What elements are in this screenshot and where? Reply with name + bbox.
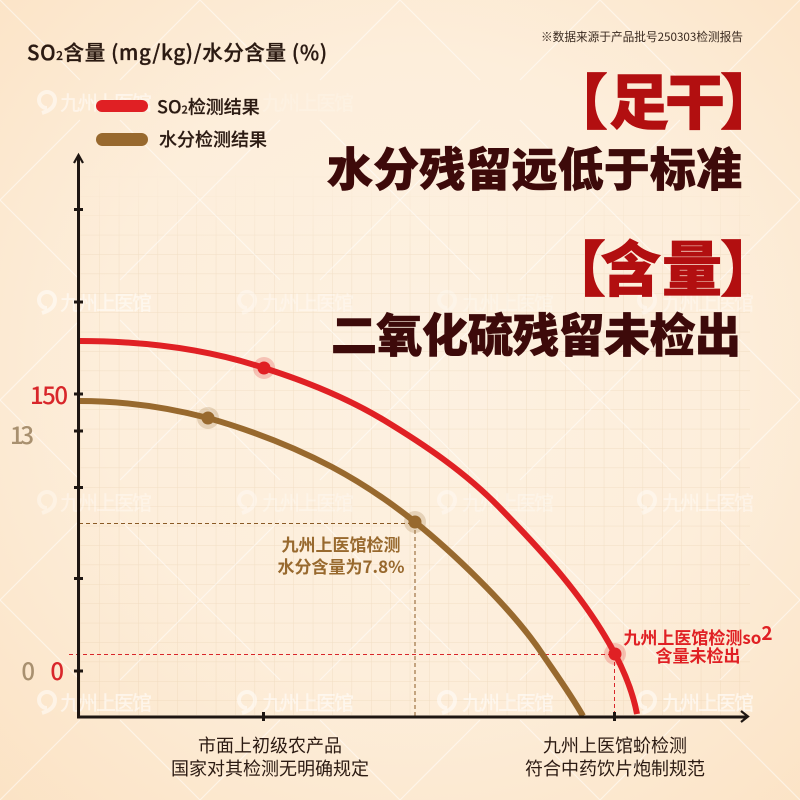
grid background (80, 170, 750, 715)
watermark text: 九州上医馆 (462, 287, 554, 316)
x label 2: 九州上医馆蚧检测 (543, 732, 687, 758)
axes (74, 155, 748, 722)
callout: SO2: 2 (761, 619, 773, 646)
x label 1: 国家对其检测无明确规定 (171, 755, 369, 781)
legend: SO2 (96, 94, 260, 120)
watermark text: 九州上医馆 (60, 87, 152, 116)
heading: 足干 (548, 55, 780, 142)
heading: 足干: 【 (548, 55, 608, 142)
callout: SO2: 九州上医馆检测so (623, 619, 773, 649)
ticks (74, 210, 614, 721)
heading: 含量: 含 (601, 222, 661, 309)
y labels: 13 (10, 416, 34, 451)
legend: water: 水分检测结果 (159, 126, 267, 152)
heading: 足干: 足 (609, 55, 669, 142)
chart (10, 155, 773, 781)
y labels (10, 376, 68, 687)
dashed guides (69, 523, 615, 716)
heading line 1: 水分残留远低于标准 (327, 134, 742, 200)
heading: 含量 (546, 222, 780, 309)
x label 1: 市面上初级农产品 (198, 732, 342, 758)
heading: 足干: 】 (720, 55, 780, 142)
legend: SO2: SO2检测结果 (157, 94, 260, 120)
heading: 含量: 】 (720, 222, 780, 309)
watermark pins (39, 92, 655, 713)
watermark text: 九州上医馆 (462, 687, 554, 716)
watermark text (60, 87, 754, 716)
heading: 足干: 干 (665, 55, 725, 142)
SO2 curve (79, 341, 637, 714)
y labels: 150 (30, 376, 68, 411)
watermark text: 九州上医馆 (60, 687, 152, 716)
y labels: 0 (21, 652, 35, 687)
y labels: 0 (50, 652, 64, 687)
x label 2: 符合中药饮片炮制规范 (525, 755, 705, 781)
watermark text: 九州上医馆 (462, 487, 554, 516)
watermark text: 九州上医馆 (662, 487, 754, 516)
data points (197, 357, 626, 665)
watermark text: 九州上医馆 (60, 287, 152, 316)
y axis title: SO2含量 (mg/kg)/水分含量 (%) (27, 36, 327, 66)
legend: water (96, 126, 267, 152)
watermark text: 九州上医馆 (662, 687, 754, 716)
legend (96, 94, 267, 152)
watermark text: 九州上医馆 (262, 87, 354, 116)
callout: water: 九州上医馆检测 (282, 531, 400, 556)
water curve (79, 401, 583, 716)
heading: 含量: 量 (662, 222, 722, 309)
source note: ※数据来源于产品批号250303检测报告 (541, 28, 743, 45)
heading line 2: 二氧化硫残留未检出 (331, 300, 741, 366)
watermark text: 九州上医馆 (262, 287, 354, 316)
callout: SO2: 含量未检出 (656, 642, 740, 667)
callout: water: 水分含量为7.8% (278, 553, 404, 578)
heading: 含量: 【 (546, 222, 606, 309)
watermark text: 九州上医馆 (662, 287, 754, 316)
watermark text: 九州上医馆 (60, 487, 152, 516)
watermark text: 九州上医馆 (262, 487, 354, 516)
watermark text: 九州上医馆 (262, 687, 354, 716)
